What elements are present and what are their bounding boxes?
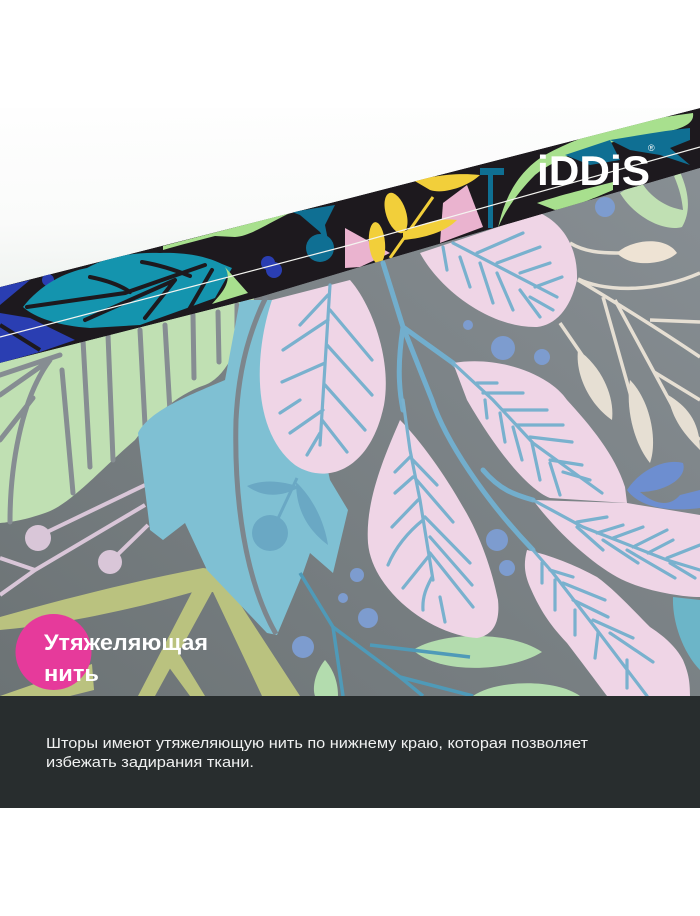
blue leaf: [138, 297, 348, 635]
pink circle badge: [16, 614, 92, 690]
pink leaf A: [260, 280, 386, 474]
pink leaf F: [525, 550, 690, 696]
badge heading: Утяжеляющая: [44, 630, 208, 655]
pink leaf E: [533, 500, 700, 597]
teal sprigs on hem: [292, 128, 690, 262]
cream floral stems right: [560, 241, 700, 463]
blue dots: [292, 197, 615, 658]
curtain hem band: [0, 108, 700, 363]
teal leaf on hem: [23, 253, 232, 328]
pink leaf B: [420, 213, 577, 327]
pink patches on hem: [345, 185, 483, 268]
blue berry on hem: [261, 256, 282, 278]
dark blue stems bottom: [300, 573, 473, 696]
small green leaves: [314, 636, 580, 696]
description text: избежать задирания ткани.: [46, 754, 254, 771]
curtain fabric panel: [0, 150, 700, 696]
description text: Шторы имеют утяжеляющую нить по нижнему краю, которая позволяет: [46, 735, 588, 752]
pink leaf C: [453, 361, 627, 503]
large green leaf with grey veins: [0, 296, 255, 523]
navy leaf on hem: [0, 280, 75, 363]
brand logo: ®: [648, 143, 655, 153]
periwinkle motif: [627, 462, 700, 509]
pink leaf D: [368, 400, 498, 638]
badge heading: нить: [44, 661, 99, 686]
wall backdrop above curtain: [0, 108, 700, 298]
yellow sprig on hem: [367, 174, 480, 265]
green crescent top right: [620, 172, 688, 228]
green patches on hem: [163, 113, 693, 304]
olive leaf bottom left: [0, 568, 300, 696]
stitching thread: [0, 147, 700, 337]
teal leaf right edge: [673, 597, 700, 670]
blue connecting stems: [383, 263, 533, 550]
dark description panel: [0, 696, 700, 808]
brand logo: iDDiS: [537, 147, 650, 194]
stems and berries left: [0, 485, 148, 595]
infographic scene: [0, 108, 700, 808]
